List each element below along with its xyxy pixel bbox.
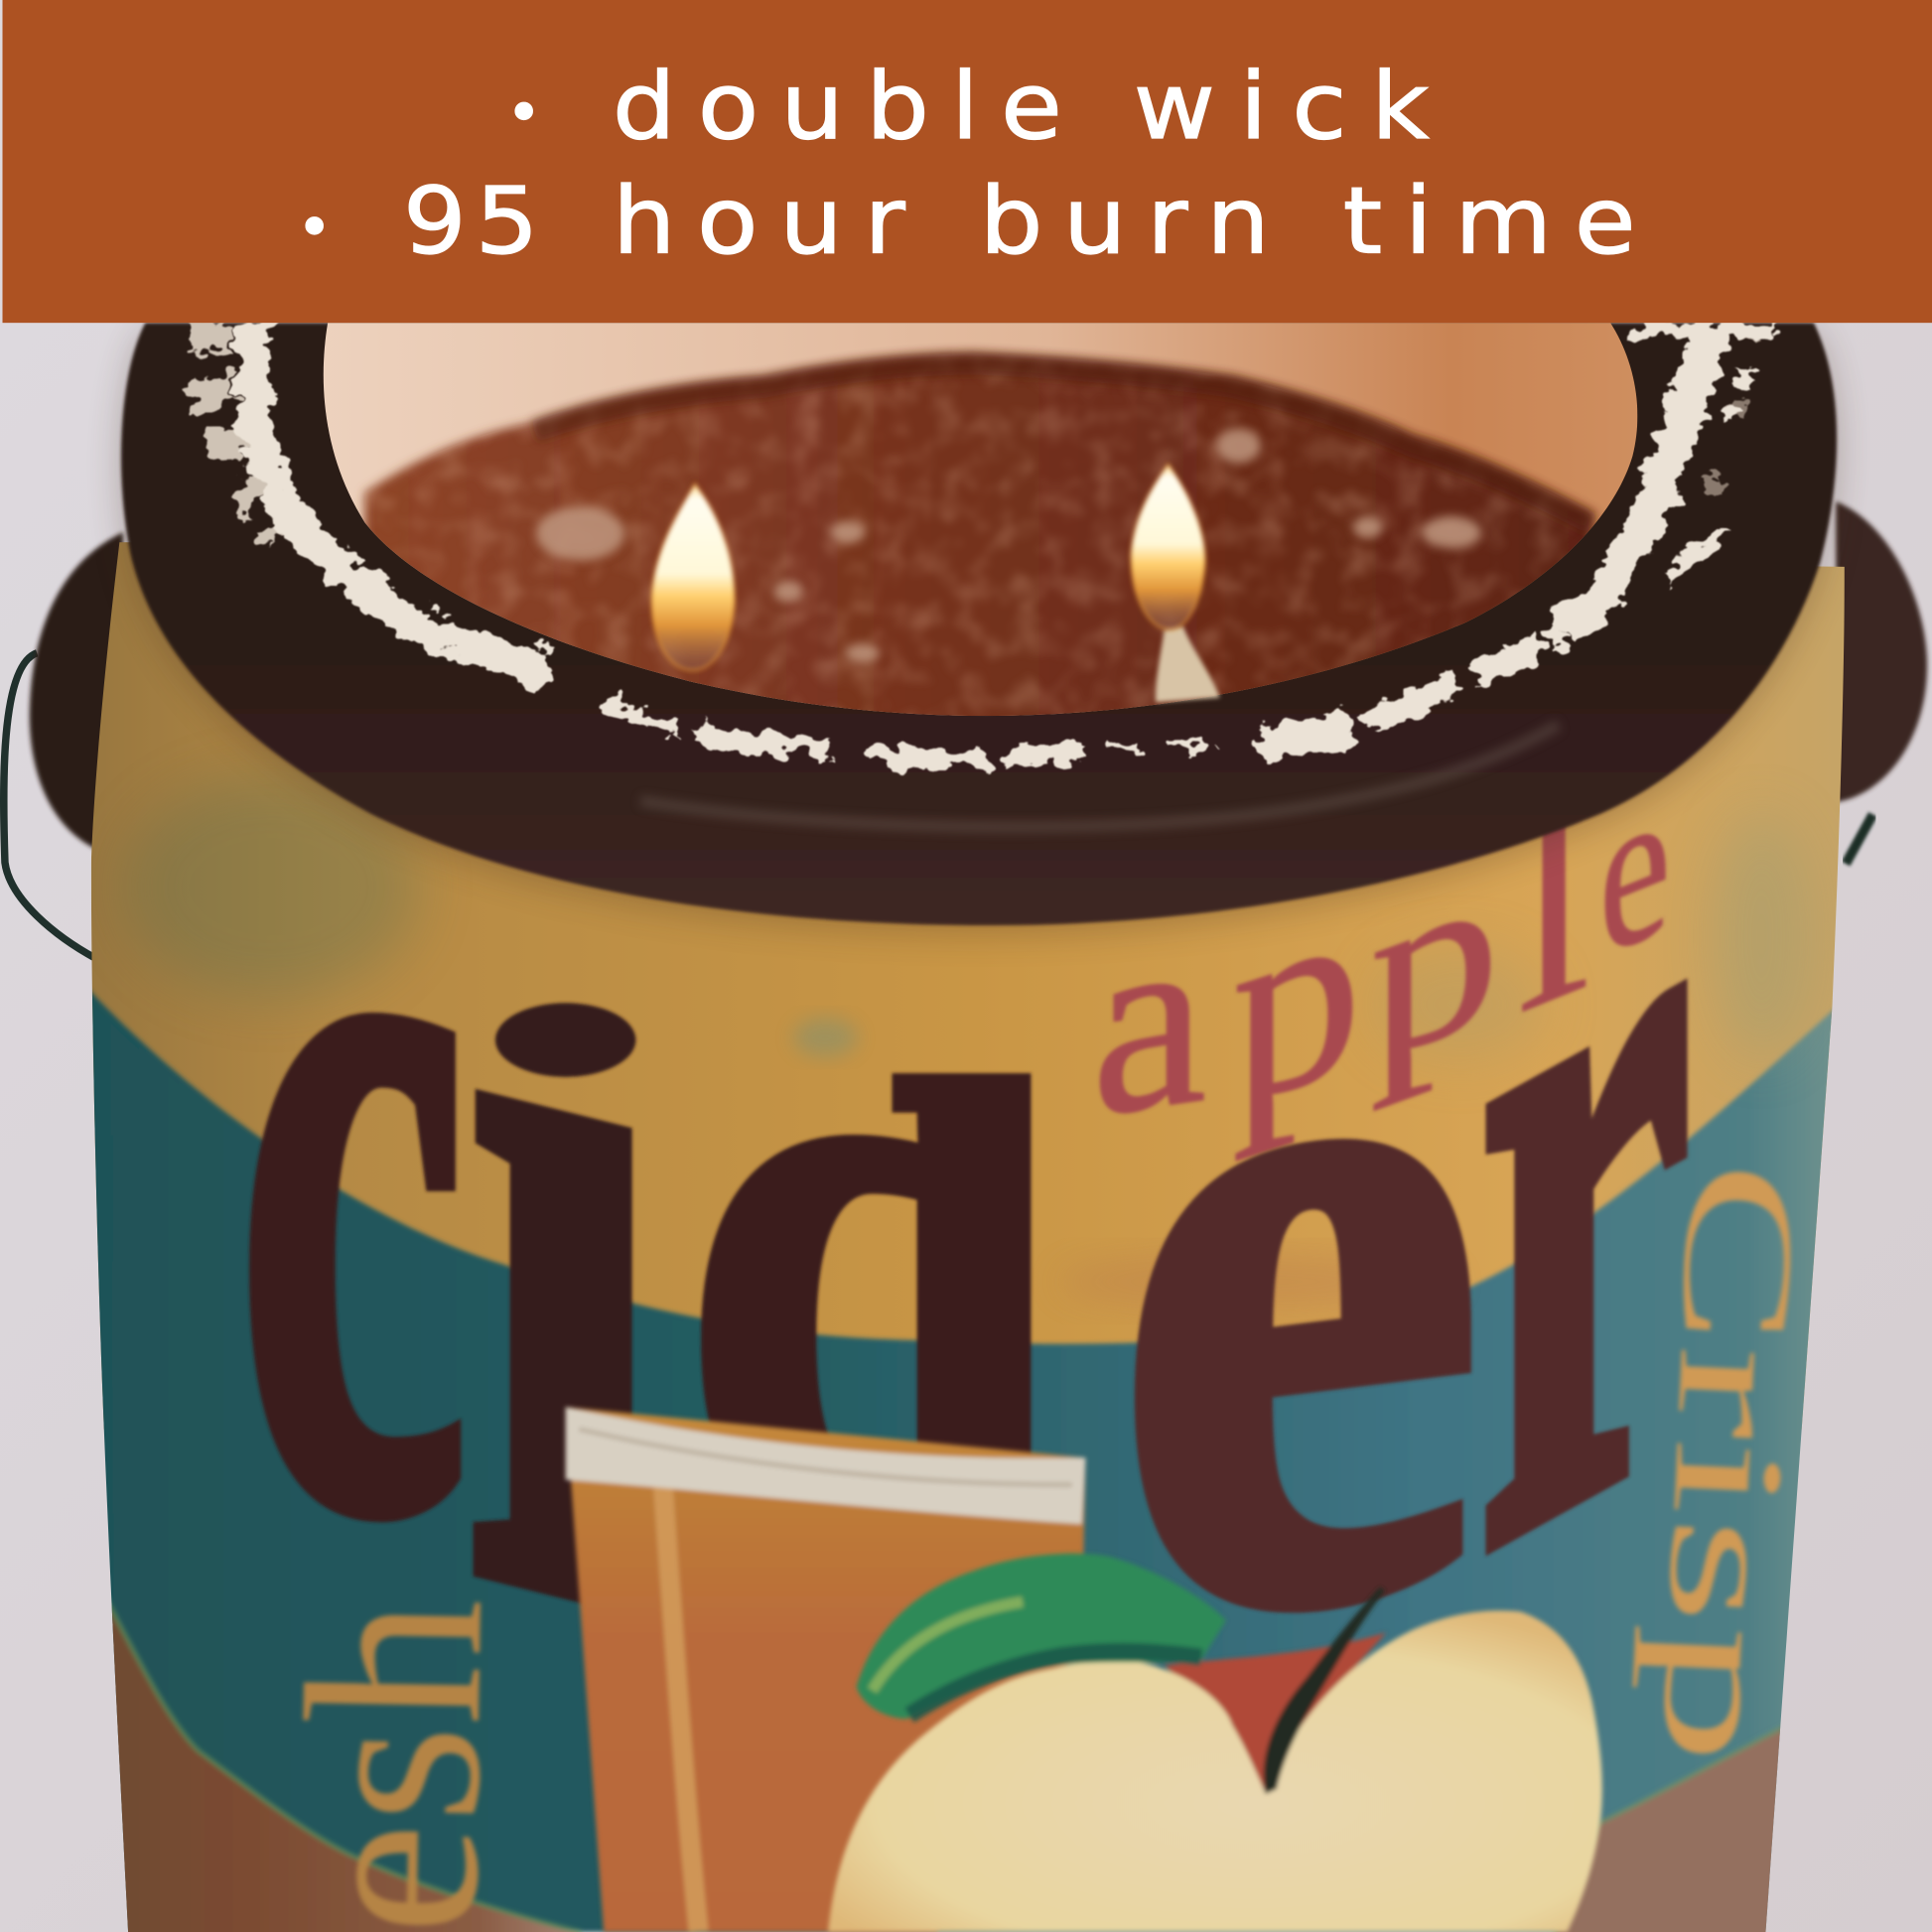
left wick bbox=[679, 628, 688, 666]
rim highlight ridge bbox=[640, 725, 1559, 827]
letter c: c bbox=[238, 601, 468, 1720]
chipped paint speckles bbox=[209, 323, 1756, 542]
label word: apple bbox=[1092, 732, 1671, 1172]
candle interior wall bbox=[314, 314, 1651, 740]
brown lower-left band bbox=[111, 1600, 584, 1932]
left flame bbox=[652, 484, 735, 670]
right flame with wick bbox=[1131, 465, 1220, 702]
brown lower-right band bbox=[1553, 1725, 1781, 1932]
red notch bbox=[1165, 1632, 1386, 1793]
chipped white paint bbox=[250, 323, 1774, 761]
banner line: 95 hour burn time: hour bbox=[613, 167, 905, 275]
banner line: double wick: wick bbox=[1134, 53, 1429, 160]
apple leaf bbox=[857, 1554, 1226, 1719]
label word: apple: p bbox=[1232, 834, 1361, 1163]
right wick bbox=[1168, 592, 1177, 629]
banner line: 95 hour burn time: burn bbox=[980, 167, 1270, 275]
teal middle band bbox=[73, 973, 1872, 1932]
label word: apple: e bbox=[1599, 732, 1671, 1005]
banner line: double wick bbox=[506, 53, 1429, 160]
painted wear patches bbox=[123, 776, 1811, 1309]
rim shadow on can bbox=[121, 331, 1837, 932]
wax speckles bbox=[536, 429, 1481, 663]
banner line: 95 hour burn time: 95 bbox=[403, 167, 539, 275]
apple stem bbox=[1264, 1587, 1385, 1794]
wax drip bbox=[1156, 625, 1220, 702]
candle can body bbox=[73, 492, 1872, 1932]
right handle bbox=[1836, 501, 1927, 864]
letter r: r bbox=[1478, 598, 1692, 1752]
wax mottling bbox=[357, 345, 1601, 740]
label word: apple: p bbox=[1370, 807, 1499, 1113]
letter e: e bbox=[1116, 737, 1482, 1819]
tan upper band bbox=[73, 492, 1872, 1430]
left handle bbox=[4, 532, 123, 959]
glass rim bbox=[566, 1407, 1085, 1524]
label word: fresh (visible letters): esh bbox=[250, 1595, 536, 1932]
apple flesh bbox=[828, 1610, 1602, 1932]
top banner bbox=[2, 0, 1932, 323]
candle rim bbox=[121, 323, 1837, 925]
label word: cider bbox=[247, 977, 1690, 1615]
label word: Crisp: Crisp bbox=[1628, 1157, 1831, 1769]
illustrated cider glass bbox=[566, 1407, 1085, 1932]
letter d: d bbox=[681, 808, 1065, 1695]
banner line: double wick: • bbox=[506, 79, 541, 148]
banner line: double wick: double bbox=[613, 53, 1062, 160]
banner line: 95 hour burn time bbox=[297, 167, 1636, 275]
label word: apple: a bbox=[1092, 869, 1206, 1172]
d serif bbox=[893, 1073, 941, 1113]
wax dark upper edge bbox=[535, 363, 1591, 523]
banner line: 95 hour burn time: time bbox=[1343, 167, 1636, 275]
banner line: 95 hour burn time: • bbox=[297, 194, 332, 262]
i dot bbox=[495, 1003, 635, 1077]
letter i: i bbox=[466, 662, 671, 1832]
wax surface bbox=[364, 353, 1591, 740]
illustrated apple bbox=[828, 1554, 1602, 1932]
label word: apple: l bbox=[1518, 753, 1589, 1069]
